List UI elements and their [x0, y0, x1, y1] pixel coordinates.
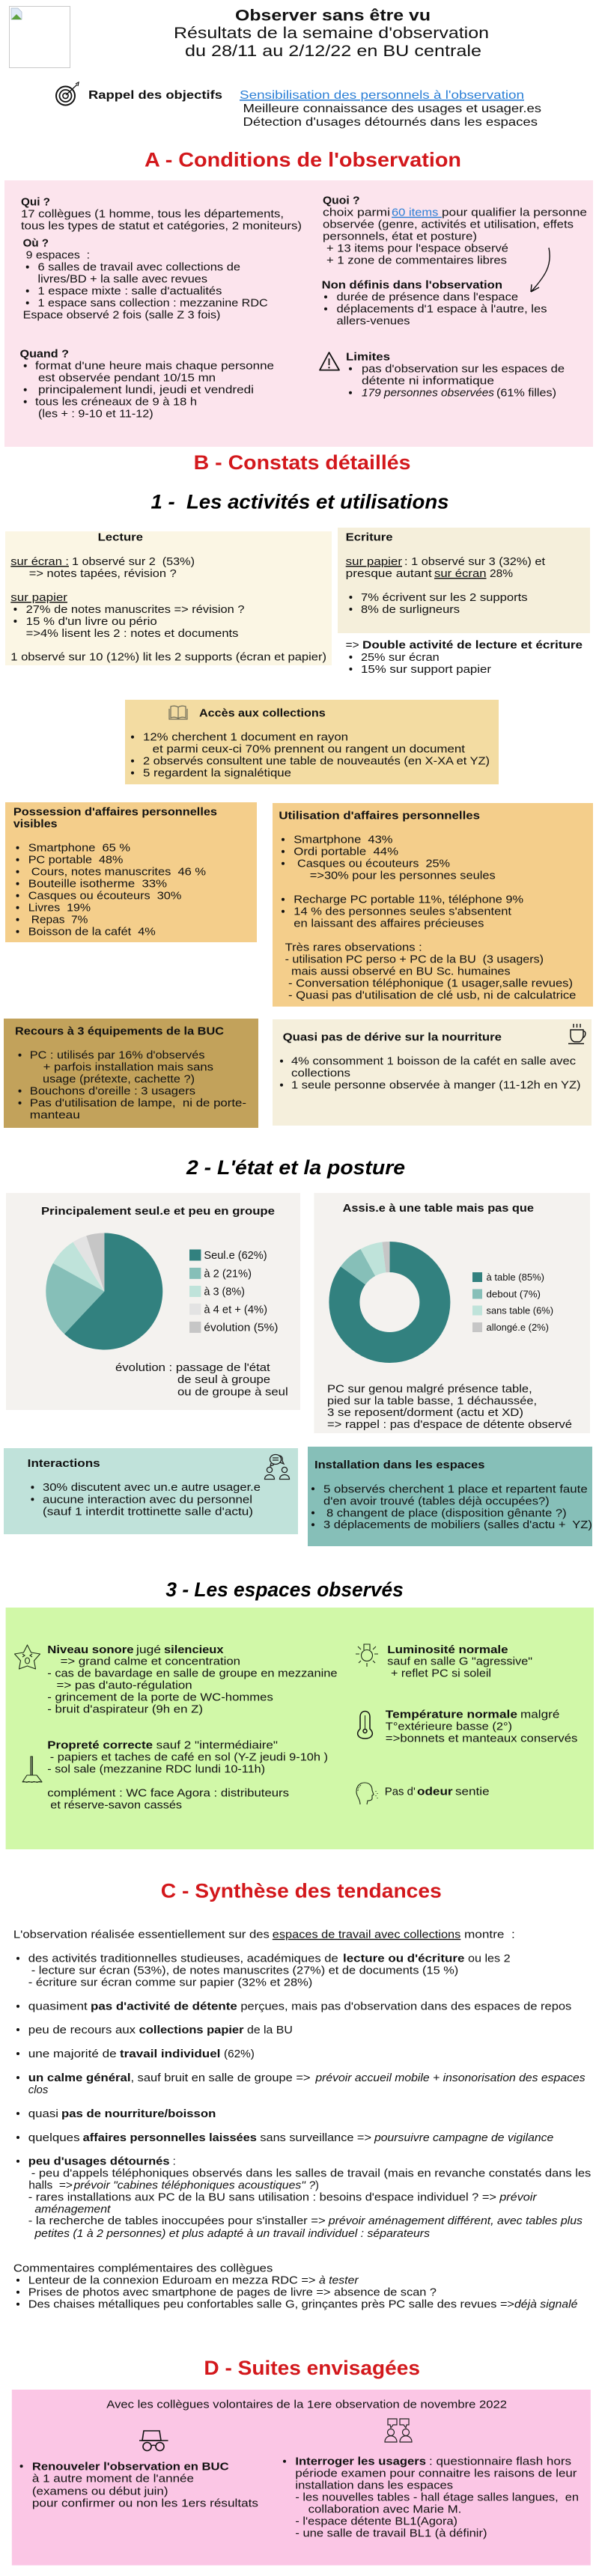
block: qui: [21, 196, 302, 233]
block: quoi: + 1 zone de commentaires libres: [326, 255, 507, 267]
block: renouveler: pour confirmer ou non les 1ers résultats: [32, 2498, 258, 2510]
panel: recours aux équipements: Recours à 3 équipements de la BUC: [15, 1026, 224, 1038]
panel: utilisation d'affaires: mais aussi observé en BU Sc. humaines: [291, 966, 511, 978]
objectives reminder: Meilleure connaissance des usages et usager.es: [243, 103, 541, 115]
panel: recours aux équipements: usage (prétexte, cachette ?): [43, 1074, 195, 1086]
panel: recours aux équipements: Bouchons d'oreille : 3 usagers: [30, 1086, 195, 1098]
panel: nourriture: 4% consomment 1 boisson de la cafét en salle avec: [291, 1056, 576, 1068]
subheading 3: 3 - Les espaces observés: [165, 1578, 404, 1601]
block: quoi: [323, 195, 587, 267]
legend: à 3 (8%): [204, 1286, 245, 1298]
block: renouveler: à 1 autre moment de l'année: [32, 2473, 194, 2485]
block: interroger: - les nouvelles tables - hall étage salles langues, en: [295, 2492, 579, 2504]
block: double activité: =>: [346, 640, 359, 652]
text block: commentaires: Prises de photos avec smartphone de pages de livre => absence de scan ?: [28, 2287, 437, 2299]
block: non définis: Non définis dans l'observation: [322, 280, 502, 292]
panel: ecriture: : 1 observé sur 3 (32%) et: [404, 556, 545, 568]
panel: ecriture: sur écran: [434, 568, 487, 580]
panel: accès aux collections: et parmi ceux-ci 70% prennent ou rangent un document: [153, 744, 465, 756]
text block: synthèse: collections papier: [139, 2024, 244, 2036]
text block: synthèse: affaires personnelles laissées: [83, 2132, 257, 2144]
note: posture: => rappel : pas d'espace de détente observé: [327, 1419, 572, 1431]
panel: possession d'affaires: Livres 19%: [28, 903, 91, 915]
panel: possession d'affaires: Cours, notes manuscrites 46 %: [31, 867, 206, 879]
block: propreté: complément : WC face Agora : distributeurs: [47, 1788, 289, 1800]
icon: thermometer: [358, 1711, 372, 1739]
note: posture: pied sur la table basse, 1 déchaussée,: [327, 1395, 537, 1407]
block: quoi: Quoi ?: [323, 195, 360, 207]
block: quand: principalement lundi, jeudi et vendredi: [38, 385, 254, 397]
panel: possession d'affaires: PC portable 48%: [28, 855, 123, 867]
text block: commentaires: Des chaises métalliques peu confortables salle G, grinçantes près PC salle des revues =>: [28, 2299, 514, 2311]
text block: commentaires: [13, 2263, 577, 2311]
note: évolution: [115, 1362, 288, 1398]
icon: people talking: [385, 2419, 412, 2442]
block: niveau sonore: => grand calme et concentration: [61, 1656, 240, 1668]
block: renouveler: (examens ou début juin): [32, 2486, 168, 2498]
text block: synthèse: pas d'activité de détente: [91, 2001, 237, 2013]
icon: conversation: [265, 1455, 289, 1479]
panel: possession d'affaires: Possession d'affaires personnelles: [13, 807, 217, 819]
block: renouveler: Renouveler l'observation en BUC: [32, 2461, 229, 2473]
text block: synthèse: petites (1 à 2 personnes) et plus adapté à un travail individuel : séparateurs: [34, 2228, 431, 2240]
block: propreté: Propreté correcte: [47, 1740, 153, 1752]
block: non définis: durée de présence dans l'espace: [337, 292, 518, 304]
subheading 2: 2 - L'état et la posture: [186, 1156, 405, 1179]
block: niveau sonore: jugé: [136, 1644, 161, 1656]
legend: Seul.e (62%): [204, 1250, 267, 1262]
block: où: 1 espace mixte : salle d'actualités: [37, 286, 222, 298]
panel: lecture: 15 % d'un livre ou pério: [26, 616, 157, 628]
panel: suites: Avec les collègues volontaires de la 1ere observation de novembre 2022: [106, 2399, 507, 2411]
icon: cup: [568, 1024, 586, 1043]
panel: accès aux collections: 12% cherchent 1 document en rayon: [143, 732, 348, 744]
panel: ecriture: Ecriture: [346, 532, 392, 544]
text block: commentaires: déjà signalé: [514, 2299, 577, 2311]
subheading 1: 1 - Les activités et utilisations: [151, 491, 449, 513]
block: interroger: période examen pour connaitre les raisons de leur: [295, 2468, 577, 2480]
text block: synthèse: (62%): [224, 2048, 255, 2060]
text block: synthèse: travail individuel: [120, 2048, 220, 2060]
block: où: livres/BD + la salle avec revues: [37, 274, 207, 286]
text block: synthèse: - écriture sur écran comme sur papier (32% et 28%): [28, 1977, 312, 1989]
text block: synthèse: - la recherche de tables inoccupées pour s'installer =>: [28, 2215, 326, 2227]
text block: synthèse: - lecture sur écran (53%), de notes manuscrites (27%) et de documents (15 %): [31, 1965, 458, 1977]
block: quand: Quand ?: [19, 349, 69, 361]
heading B: B - Constats détaillés: [194, 451, 410, 474]
block: où: Espace observé 2 fois (salle Z 3 fois): [23, 310, 220, 322]
pie chart: [46, 1233, 162, 1350]
title: Observer sans être vu: [235, 6, 431, 24]
panel: ecriture: sur papier: [346, 556, 402, 568]
block: où: 1 espace sans collection : mezzanine RDC: [37, 298, 268, 310]
block: niveau sonore: [47, 1644, 338, 1716]
panel: lecture: sur papier: [10, 592, 67, 604]
icon: warning: [320, 352, 339, 370]
title: [174, 6, 489, 60]
block: niveau sonore: - grincement de la porte de WC-hommes: [47, 1692, 273, 1704]
panel: nourriture: [273, 1019, 592, 1126]
panel: utilisation d'affaires: =>30% pour les personnes seules: [310, 870, 496, 882]
panel: interactions: Interactions: [28, 1458, 100, 1470]
text block: synthèse: :: [173, 2156, 176, 2168]
block: limites: détente ni informatique: [362, 376, 494, 388]
panel: utilisation d'affaires: - utilisation PC perso + PC de la BU (3 usagers): [285, 954, 544, 966]
block: qui: 17 collègues (1 homme, tous les départements,: [21, 209, 284, 221]
block: double activité: 25% sur écran: [361, 652, 440, 664]
block: interroger: - une salle de travail BL1 (à définir): [295, 2528, 487, 2540]
legend: [189, 1250, 278, 1334]
panel: installation: 5 observés cherchent 1 place et repartent faute: [323, 1483, 588, 1495]
text block: synthèse: pas de nourriture/boisson: [61, 2108, 216, 2120]
heading A: A - Conditions de l'observation: [145, 148, 461, 171]
block: limites: (61% filles): [496, 388, 556, 400]
panel: installation: 3 déplacements de mobiliers (salles d'actu + YZ): [323, 1519, 592, 1531]
panel: nourriture: collections: [291, 1068, 350, 1080]
panel: recours aux équipements: PC : utilisés par 16% d'observés: [30, 1050, 204, 1062]
panel: utilisation d'affaires: Très rares observations :: [285, 942, 422, 954]
text block: synthèse: , sauf bruit en salle de groupe =>: [130, 2072, 310, 2084]
text block: synthèse: prévoir aménagement différent, avec tables plus: [328, 2215, 583, 2227]
text block: synthèse: montre :: [464, 1929, 515, 1941]
block: interroger: - l'espace détente BL1(Agora): [295, 2516, 457, 2528]
panel: lecture: Lecture: [98, 532, 143, 544]
panel: ecriture: presque autant: [346, 568, 432, 580]
block: température: Température normale: [386, 1709, 517, 1721]
panel: interactions: (sauf 1 interdit trottinette salle d'actu): [43, 1506, 253, 1518]
block: niveau sonore: - bruit d'aspirateur (9h en Z): [47, 1704, 203, 1716]
block: où: 9 espaces :: [26, 249, 90, 261]
panel: nourriture: 1 seule personne observée à manger (11-12h en YZ): [291, 1080, 581, 1092]
panel: lecture: => notes tapées, révision ?: [29, 568, 177, 580]
panel: installation: d'en avoir trouvé (tables déjà occupées?): [323, 1495, 550, 1507]
objectives reminder: Détection d'usages détournés dans les espaces: [243, 116, 538, 129]
panel: utilisation d'affaires: Utilisation d'affaires personnelles: [279, 811, 480, 822]
text block: synthèse: peu de recours aux: [28, 2024, 136, 2036]
legend: debout (7%): [487, 1289, 541, 1299]
block: quoi: 60 items: [392, 207, 442, 219]
text block: synthèse: lecture ou d'écriture: [343, 1953, 464, 1965]
panel: utilisation d'affaires: Ordi portable 44%: [294, 846, 398, 858]
block: propreté: et réserve-savon cassés: [50, 1800, 182, 1812]
panel: ecriture: 8% de surligneurs: [361, 604, 460, 616]
note: posture: 3 se reposent/dorment (actu et XD): [327, 1407, 523, 1419]
arrow: [531, 248, 550, 292]
text block: synthèse: clos: [28, 2084, 49, 2096]
block: quand: est observée pendant 10/15 mn: [38, 373, 216, 385]
panel: lecture: 27% de notes manuscrites => révision ?: [26, 604, 244, 616]
legend: à 2 (21%): [204, 1268, 252, 1280]
block: luminosité: sauf en salle G "agressive": [387, 1656, 532, 1668]
block: quand: tous les créneaux de 9 à 18 h: [35, 397, 197, 409]
text block: synthèse: perçues, mais pas d'observation dans des espaces de repos: [240, 2001, 571, 2013]
panel: recours aux équipements: Pas d'utilisation de lampe, ni de porte-: [30, 1098, 246, 1110]
block: odeur: odeur: [417, 1786, 453, 1798]
block: luminosité: [387, 1644, 532, 1680]
text block: synthèse: poursuivre campagne de vigilance: [374, 2132, 553, 2144]
panel: possession d'affaires: Boisson de la cafét 4%: [28, 927, 156, 938]
block: quand: (les + : 9-10 et 11-12): [38, 409, 153, 421]
block: propreté: sauf 2 "intermédiaire": [156, 1740, 278, 1752]
note: évolution: évolution : passage de l'état: [115, 1362, 270, 1374]
note: évolution: ou de groupe à seul: [177, 1386, 288, 1398]
block: niveau sonore: Niveau sonore: [47, 1644, 134, 1656]
panel: interactions: 30% discutent avec un.e autre usager.e: [43, 1482, 261, 1494]
panel: accès aux collections: 5 regardent la signalétique: [143, 768, 291, 780]
block: interroger: [283, 2456, 579, 2540]
objectives reminder: Rappel des objectifs: [88, 89, 222, 102]
panel: installation: 8 changent de place (disposition gênante ?): [326, 1507, 567, 1519]
panel: interactions: aucune interaction avec du personnel: [43, 1494, 252, 1506]
icon: light bulb: [356, 1644, 378, 1667]
block: interroger: collaboration avec Marie M.: [308, 2504, 461, 2516]
block: niveau sonore: silencieux: [164, 1644, 224, 1656]
block: double activité: [346, 640, 583, 676]
block: qui: Qui ?: [21, 196, 50, 208]
text block: synthèse: prévoir: [499, 2192, 538, 2204]
text block: synthèse: peu d'usages détournés: [28, 2156, 169, 2168]
legend: à 4 et + (4%): [204, 1304, 267, 1316]
panel: lecture: 1 observé sur 10 (12%) lit les 2 supports (écran et papier): [10, 652, 326, 664]
block: limites: Limites: [346, 352, 390, 364]
block: propreté: [47, 1740, 328, 1812]
icon: head smelling: [356, 1783, 377, 1804]
block: renouveler: [20, 2461, 258, 2510]
panel: installation: [308, 1447, 592, 1546]
block: où: [23, 237, 268, 322]
block: luminosité: Luminosité normale: [387, 1644, 508, 1656]
block: non définis: allers-venues: [337, 316, 410, 328]
block: non définis: [322, 280, 547, 328]
block: quoi: choix parmi: [323, 207, 390, 219]
panel: posture: Assis.e à une table mais pas que: [343, 1203, 534, 1215]
panel: seul ou en groupe: Principalement seul.e et peu en groupe: [41, 1206, 275, 1218]
title: Résultats de la semaine d'observation: [174, 24, 489, 42]
panel: accès aux collections: Accès aux collections: [199, 708, 326, 720]
text block: commentaires: Lenteur de la connexion Eduroam en mezza RDC =>: [28, 2275, 315, 2287]
block: quoi: observée (genre, activités et utilisation, effets: [323, 219, 574, 231]
panel: possession d'affaires: visibles: [13, 819, 57, 831]
panel: espaces observés: [6, 1608, 594, 1849]
text block: synthèse: aménagement: [34, 2204, 111, 2216]
text block: synthèse: prévoir accueil mobile + insonorisation des espaces: [314, 2072, 586, 2084]
block: odeur: [385, 1786, 490, 1798]
note: posture: [327, 1383, 572, 1431]
legend: évolution (5%): [204, 1322, 278, 1334]
block: qui: tous les types de statut et catégories, 2 moniteurs): [21, 221, 302, 233]
panel: ecriture: 7% écrivent sur les 2 supports: [361, 592, 528, 604]
panel: accès aux collections: 2 observés consultent une table de nouveautés (en X-XA et YZ): [143, 756, 490, 768]
panel: lecture: 1 observé sur 2 (53%): [72, 556, 195, 568]
block: quoi: personnels, état et posture): [323, 231, 477, 243]
panel: recours aux équipements: manteau: [30, 1110, 80, 1122]
panel: ecriture: [338, 528, 590, 633]
block: niveau sonore: => pas d'auto-régulation: [57, 1680, 192, 1692]
block: quoi: + 13 items pour l'espace observé: [326, 243, 508, 255]
panel: suites: [12, 2390, 591, 2566]
block: propreté: - sol sale (mezzanine RDC lundi 10-11h): [47, 1764, 265, 1776]
panel: possession d'affaires: Smartphone 65 %: [28, 843, 130, 855]
legend: sans table (6%): [487, 1305, 553, 1316]
panel: seul ou en groupe: [6, 1193, 300, 1410]
panel: ecriture: 28%: [490, 568, 513, 580]
text block: synthèse: prévoir "cabines téléphoniques acoustiques" ?: [73, 2180, 316, 2192]
text block: synthèse: halls =>: [28, 2180, 73, 2192]
panel: utilisation d'affaires: - Quasi pas d'utilisation de clé usb, ni de calculatrice: [288, 990, 576, 1002]
panel: possession d'affaires: Repas 7%: [31, 915, 88, 927]
block: où: 6 salles de travail avec collections de: [37, 262, 240, 274]
block: température: [386, 1709, 577, 1745]
panel: utilisation d'affaires: [273, 803, 593, 1007]
broken image placeholder: [9, 6, 70, 67]
panel: utilisation d'affaires: 14 % des personnes seules s'absentent: [294, 906, 511, 918]
block: limites: [346, 352, 565, 400]
text block: synthèse: des activités traditionnelles studieuses, académiques de: [28, 1953, 338, 1965]
panel: accès aux collections: [125, 700, 499, 784]
text block: synthèse: ou les 2: [468, 1953, 511, 1965]
panel: lecture: sur écran :: [10, 556, 69, 568]
panel: lecture: =>4% lisent les 2 : notes et documents: [26, 628, 238, 640]
block: quand: [19, 349, 274, 421]
text block: synthèse: - rares installations aux PC de la BU sans utilisation : besoins d'espace individuel ? =>: [28, 2192, 496, 2204]
title: du 28/11 au 2/12/22 en BU centrale: [185, 42, 481, 60]
legend: à table (85%): [487, 1272, 544, 1283]
block: température: malgré: [520, 1709, 559, 1721]
text block: synthèse: quasi: [28, 2108, 58, 2120]
panel: nourriture: Quasi pas de dérive sur la nourriture: [283, 1032, 502, 1044]
panel: possession d'affaires: Bouteille isotherme 33%: [28, 879, 167, 891]
text block: synthèse: espaces de travail avec collections: [273, 1929, 460, 1941]
panel: recours aux équipements: [4, 1019, 258, 1128]
block: niveau sonore: - cas de bavardage en salle de groupe en mezzanine: [47, 1668, 338, 1680]
panel: utilisation d'affaires: Smartphone 43%: [294, 834, 392, 846]
note: posture: PC sur genou malgré présence table,: [327, 1383, 532, 1395]
text block: synthèse: une majorité de: [28, 2048, 117, 2060]
note: évolution: de seul à groupe: [177, 1374, 270, 1386]
panel: posture: [314, 1193, 590, 1433]
panel: installation: Installation dans les espaces: [314, 1459, 485, 1471]
block: luminosité: + reflet PC si soleil: [391, 1668, 491, 1680]
text block: synthèse: - peu d'appels téléphoniques observés dans les salles de travail (mais en revanche constatés dans les: [31, 2168, 591, 2180]
icon: incognito: [139, 2431, 168, 2450]
block: odeur: sentie: [455, 1786, 490, 1798]
block: limites: pas d'observation sur les espaces de: [362, 364, 565, 376]
block: température: T°extérieure basse (2°): [386, 1721, 512, 1733]
heading D: D - Suites envisagées: [204, 2357, 420, 2379]
text block: synthèse: quelques: [28, 2132, 80, 2144]
panel: recours aux équipements: + parfois installation mais sans: [43, 1062, 213, 1074]
panel: utilisation d'affaires: en laissant des affaires précieuses: [294, 918, 484, 930]
icon: noisy star: [15, 1645, 40, 1669]
panel: utilisation d'affaires: Recharge PC portable 11%, téléphone 9%: [294, 894, 523, 906]
icon: broom: [22, 1756, 42, 1783]
icon: target: [56, 82, 79, 105]
text block: synthèse: un calme général: [28, 2072, 130, 2084]
objectives reminder: Sensibilisation des personnels à l'observation: [240, 89, 524, 102]
block: double activité: Double activité de lecture et écriture: [362, 640, 583, 652]
panel: conditions: [4, 180, 593, 447]
block: non définis: déplacements d'1 espace à l'autre, les: [337, 304, 547, 316]
block: interroger: : questionnaire flash hors: [429, 2456, 571, 2468]
text block: commentaires: Commentaires complémentaires des collègues: [13, 2263, 273, 2275]
objectives reminder: [88, 89, 541, 129]
panel: utilisation d'affaires: Casques ou écouteurs 25%: [297, 858, 450, 870]
block: quoi: pour qualifier la personne: [442, 207, 587, 219]
block: double activité: 15% sur support papier: [361, 664, 491, 676]
text block: synthèse: de la BU: [247, 2024, 293, 2036]
panel: possession d'affaires: Casques ou écouteurs 30%: [28, 891, 181, 903]
text block: synthèse: sans surveillance =>: [260, 2132, 371, 2144]
block: interroger: Interroger les usagers: [295, 2456, 426, 2468]
block: propreté: - papiers et taches de café en sol (Y-Z jeudi 9-10h ): [50, 1752, 328, 1764]
text block: synthèse: L'observation réalisée essentiellement sur des: [13, 1929, 270, 1941]
legend: [472, 1272, 553, 1333]
block: interroger: installation dans les espaces: [295, 2480, 453, 2492]
legend: allongé.e (2%): [487, 1322, 549, 1333]
text block: commentaires: à tester: [319, 2275, 359, 2287]
text block: synthèse: [13, 1929, 591, 2240]
donut chart: [344, 1257, 435, 1347]
icon: book: [169, 706, 187, 719]
block: où: Où ?: [23, 237, 49, 249]
panel: utilisation d'affaires: - Conversation téléphonique (1 usager,salle revues): [288, 978, 573, 990]
heading C: C - Synthèse des tendances: [161, 1880, 442, 1902]
block: température: =>bonnets et manteaux conservés: [386, 1733, 577, 1745]
panel: interactions: [4, 1448, 298, 1534]
block: limites: 179 personnes observées: [362, 388, 495, 400]
panel: possession d'affaires: [5, 802, 257, 942]
block: quand: format d'une heure mais chaque personne: [35, 361, 274, 373]
text block: synthèse: quasiment: [28, 2001, 88, 2013]
block: odeur: Pas d': [385, 1786, 416, 1798]
panel: lecture: [5, 531, 332, 665]
text block: synthèse: ): [315, 2180, 319, 2192]
